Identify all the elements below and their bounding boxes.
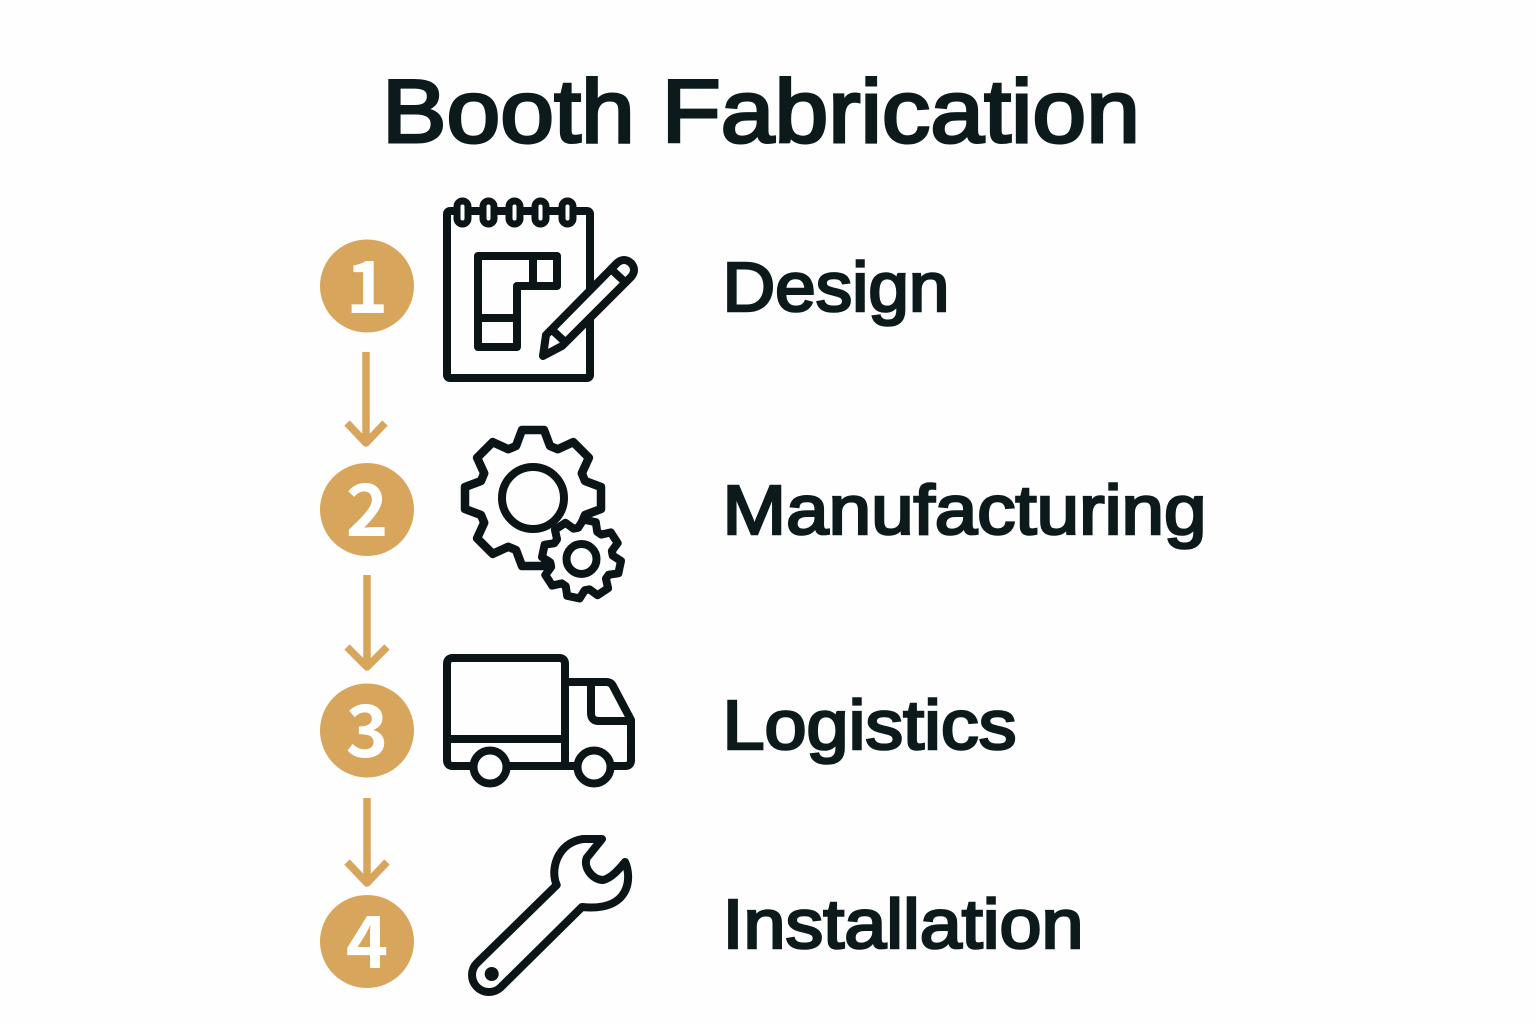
label: design: Design (722, 248, 950, 326)
icon: wrench (472, 839, 628, 992)
number badge 3: 3 (346, 673, 388, 778)
step 4: installation (320, 839, 1084, 992)
number badge 4: 4 (346, 884, 388, 989)
number badge 1 (320, 229, 414, 334)
step 2: manufacturing (320, 430, 1206, 605)
number badge 3 (320, 673, 414, 778)
label: installation: Installation (722, 885, 1084, 963)
number badge 2 (320, 452, 414, 557)
step 3: logistics (320, 658, 1016, 784)
icon: delivery truck (447, 658, 631, 784)
number badge 2: 2 (346, 452, 388, 557)
arrow from step 1 to step 2 (347, 352, 385, 443)
step 1: design (320, 201, 950, 378)
label: logistics: Logistics (722, 686, 1016, 764)
arrow from step 2 to step 3 (347, 575, 387, 667)
icon: gears (465, 430, 628, 605)
number badge 1: 1 (346, 229, 388, 334)
icon: notepad with floor plan and pencil (447, 201, 634, 378)
title: Booth Fabrication (382, 61, 1140, 161)
number badge 4 (320, 884, 414, 989)
label: manufacturing: Manufacturing (722, 471, 1206, 549)
arrow from step 3 to step 4 (347, 798, 387, 883)
